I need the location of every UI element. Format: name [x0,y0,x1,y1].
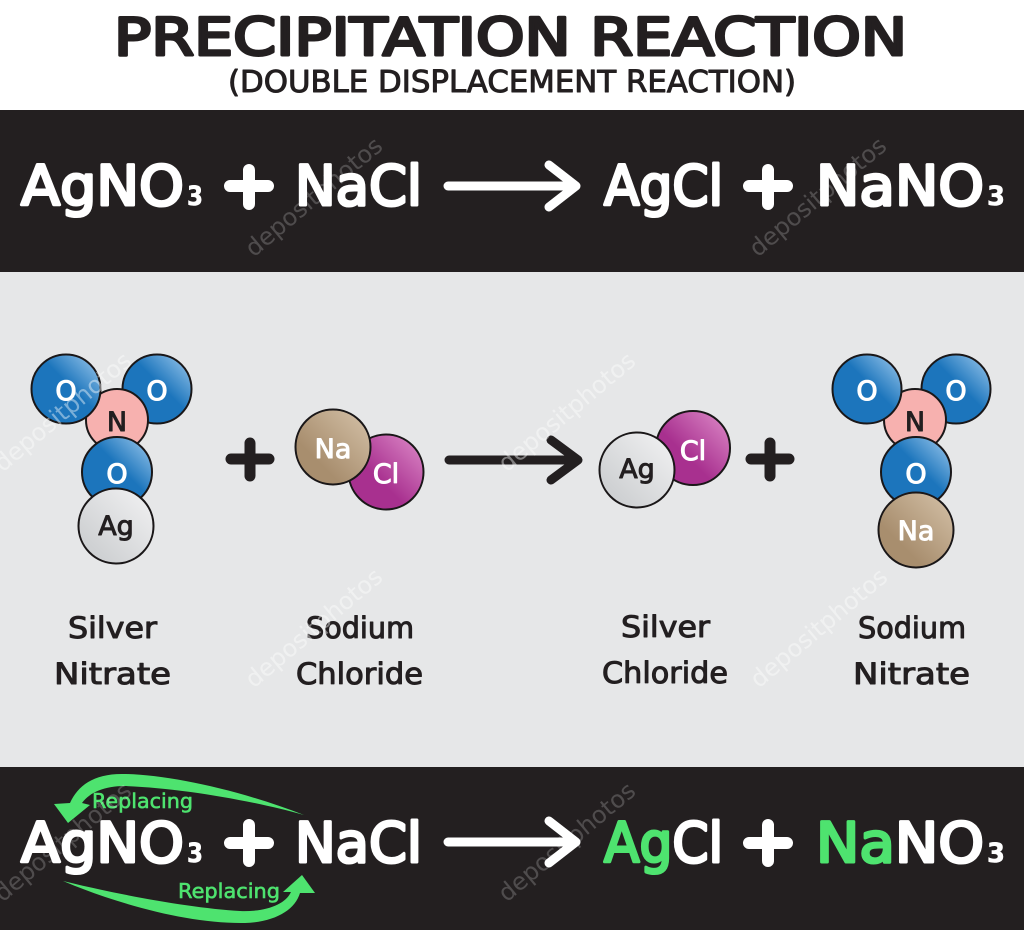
reaction arrow [448,821,576,863]
label: sodium nitrate [853,611,970,691]
reaction arrow [449,440,578,480]
plus sign [231,443,269,476]
molecule: silver nitrate: O [55,376,77,407]
label: silver chloride: Silver [621,610,710,644]
reactant: NaCl: NaCl [295,811,422,875]
molecule: sodium nitrate: O [945,376,967,407]
panel: molecules [0,272,1024,767]
plus sign [749,170,787,204]
molecule: sodium nitrate: N [905,407,925,438]
plus sign [751,443,789,476]
product: NaNO3 with green Na: 3 [987,838,1005,869]
molecule: silver chloride: Ag [619,454,655,485]
reaction arrow [448,165,576,207]
label: sodium chloride: Sodium [306,611,414,645]
molecule: sodium nitrate: O [905,459,927,490]
molecule: sodium nitrate: O [856,376,878,407]
label: silver nitrate: Silver [68,611,157,645]
product: NaNO3: 3 [987,181,1005,212]
arrow: bottom replacing [63,875,315,923]
molecule: silver nitrate: Ag [98,511,134,542]
molecule: silver chloride [600,411,730,508]
reactant: AgNO3: 3 [187,181,203,212]
label: sodium nitrate: Nitrate [853,657,970,691]
reactant: NaCl: NaCl [295,154,422,218]
label: sodium chloride [296,611,423,691]
molecule: sodium nitrate: Na [898,516,934,547]
molecule: sodium nitrate [832,354,990,568]
molecule: silver chloride: Cl [680,436,706,467]
reactant: AgNO3: AgNO [21,154,184,218]
molecule: sodium chloride: Cl [373,459,399,490]
plus sign [230,825,268,861]
molecule: sodium chloride [296,410,424,510]
watermarks: depositphotos [240,562,388,693]
label: sodium chloride: Chloride [296,657,423,691]
panel: bottom equation band [0,767,1024,930]
label: bottom replacing: Replacing [178,879,280,903]
product: AgCl with green Ag: AgCl [604,811,723,875]
reactant: AgNO3: AgNO [21,811,184,875]
label: top replacing: Replacing [92,789,193,813]
watermarks: depositphotos [493,776,641,907]
title [114,8,907,100]
title: PRECIPITATION REACTION [114,8,907,68]
watermarks: depositphotos [493,346,641,477]
plus sign [749,825,787,861]
reactant: AgNO3: 3 [187,838,203,869]
watermarks: depositphotos [744,131,892,262]
molecule: silver nitrate: N [107,407,127,438]
molecule: silver nitrate: O [106,459,128,490]
label: sodium nitrate: Sodium [858,611,966,645]
label: silver nitrate: Nitrate [54,657,171,691]
watermarks: depositphotos [745,562,893,693]
molecule: sodium chloride: Na [315,434,351,465]
label: silver chloride: Chloride [602,656,728,690]
molecule: silver nitrate: O [146,376,168,407]
panel: top equation band [0,110,1024,272]
watermarks [0,131,893,907]
product: NaNO3 with green Na: NaNO [816,811,984,875]
product: AgCl: AgCl [604,154,723,218]
product: NaNO3: NaNO [816,154,984,218]
title: (DOUBLE DISPLACEMENT REACTION) [228,65,796,100]
label: silver chloride [602,610,728,690]
arrow: top replacing [54,774,304,823]
plus sign [230,170,268,204]
watermarks: depositphotos [240,131,388,262]
molecule: silver nitrate [32,354,192,564]
label: silver nitrate [54,611,171,691]
